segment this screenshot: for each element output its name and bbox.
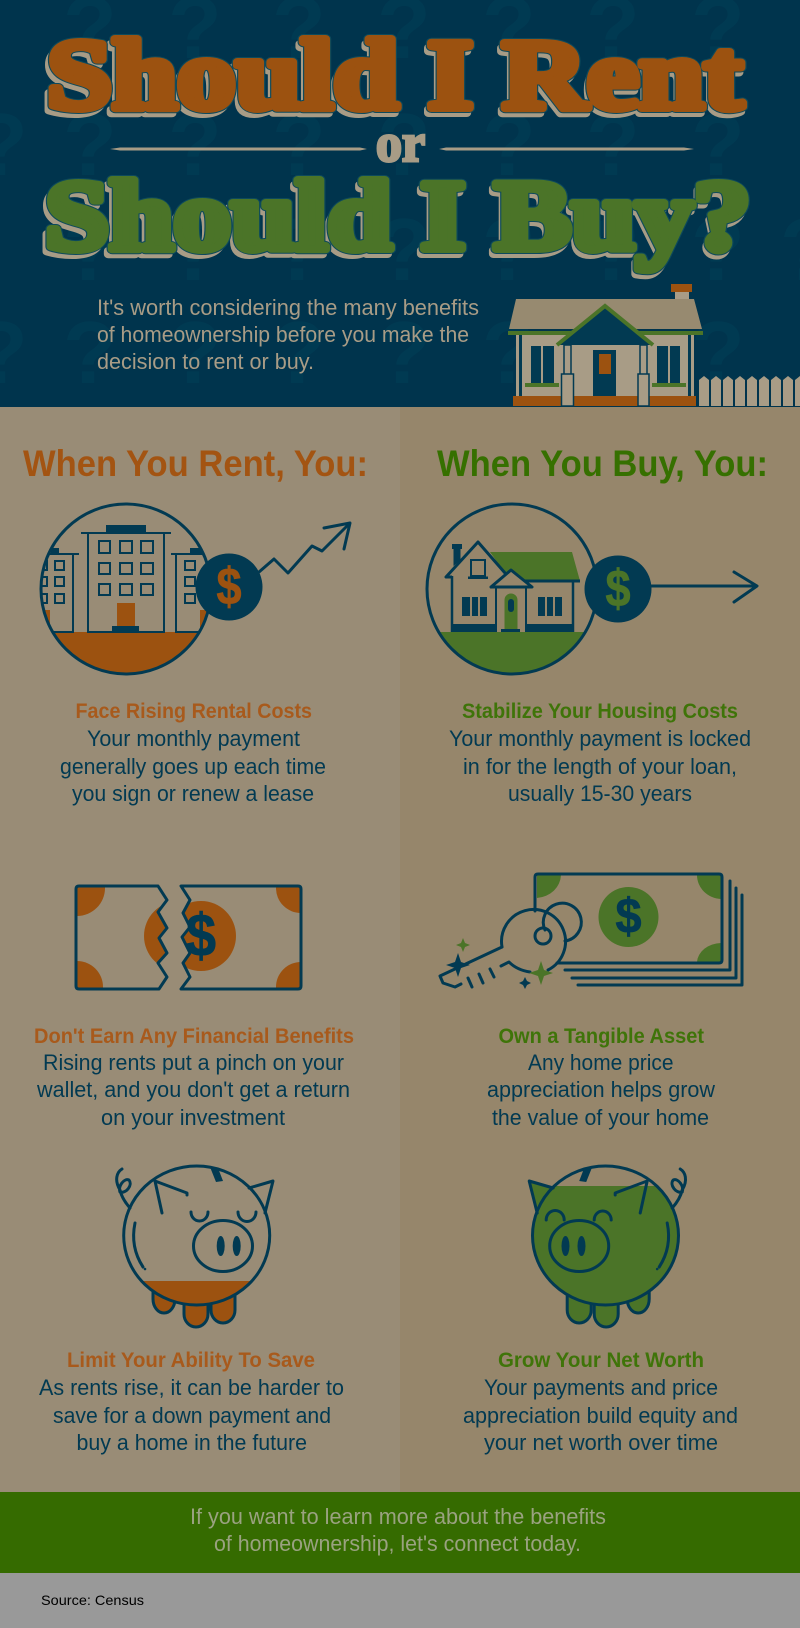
panel: source footer xyxy=(0,1573,800,1628)
text: stabilize your housing costs: in for the length of your loan, xyxy=(463,754,737,779)
text: own a tangible asset xyxy=(487,1025,715,1130)
panel: call to action banner: of homeownership, let's connect today. xyxy=(214,1531,581,1556)
text: don't earn any financial benefits: Don't Earn Any Financial Benefits xyxy=(34,1025,354,1048)
question mark pattern: ? xyxy=(586,95,640,194)
intro text: decision to rent or buy. xyxy=(97,349,314,374)
icon: torn dollar bill xyxy=(74,884,302,990)
text: grow your net worth: appreciation build equity and xyxy=(463,1403,738,1428)
title: or with rules: or xyxy=(376,113,425,173)
title: Should I Rent: Should I Rent xyxy=(43,24,741,135)
intro text: It's worth considering the many benefits xyxy=(97,295,479,320)
heading: when you buy: When You Buy, You: xyxy=(437,443,768,484)
question mark pattern: ? xyxy=(377,303,431,402)
question mark pattern: ? xyxy=(482,95,536,194)
text: face rising rental costs: generally goes up each time xyxy=(60,754,326,779)
text: own a tangible asset: appreciation helps grow xyxy=(487,1077,715,1102)
title: Should I Rent: Should I Rent xyxy=(47,19,743,130)
icon: piggy bank nearly empty xyxy=(117,1166,275,1327)
question mark pattern: ? xyxy=(63,303,117,402)
icon: picket fence xyxy=(699,376,800,406)
intro text: of homeownership before you make the xyxy=(97,322,469,347)
icon: house in circle with flat arrow: $ xyxy=(606,560,631,618)
question mark pattern: ? xyxy=(63,95,117,194)
text: limit your ability to save: save for a down payment and xyxy=(53,1403,331,1428)
title: Should I Buy?: Should I Buy? xyxy=(41,165,749,276)
text: don't earn any financial benefits: on your investment xyxy=(101,1105,285,1130)
text: own a tangible asset: Any home price xyxy=(528,1050,674,1075)
question mark pattern: ? xyxy=(586,200,640,299)
question mark pattern: ? xyxy=(482,303,536,402)
title: or with rules xyxy=(110,113,694,173)
icon: torn dollar bill: $ xyxy=(186,902,216,969)
text: don't earn any financial benefits xyxy=(34,1025,354,1130)
question mark pattern: ? xyxy=(168,303,222,402)
text: stabilize your housing costs: usually 15-30 years xyxy=(508,781,692,806)
question mark pattern: ? xyxy=(168,95,222,194)
text: stabilize your housing costs: Stabilize Your Housing Costs xyxy=(462,700,738,723)
question mark pattern: ? xyxy=(272,95,326,194)
panel: header background xyxy=(0,0,800,407)
text: grow your net worth: your net worth over time xyxy=(484,1430,718,1455)
icon: key and cash stack: $ xyxy=(616,890,642,944)
question mark pattern: ? xyxy=(272,200,326,299)
icon: apartment buildings in circle: $ xyxy=(216,558,242,616)
text: don't earn any financial benefits: Rising rents put a pinch on your xyxy=(43,1050,344,1075)
title: Should I Buy?: Should I Buy? xyxy=(45,160,751,271)
question mark pattern: ? xyxy=(377,95,431,194)
panel: source footer: Source: Census xyxy=(41,1592,144,1608)
icon: house illustration xyxy=(508,284,703,406)
question mark pattern: ? xyxy=(691,95,745,194)
text: limit your ability to save: As rents rise, it can be harder to xyxy=(39,1375,344,1400)
panel: call to action banner xyxy=(0,1492,800,1573)
question mark pattern: ? xyxy=(691,303,745,402)
text: stabilize your housing costs xyxy=(449,700,751,806)
question mark pattern: ? xyxy=(272,303,326,402)
icon: house in circle with flat arrow xyxy=(427,504,757,692)
icon: piggy bank nearly full xyxy=(527,1166,686,1327)
text: limit your ability to save: buy a home in the future xyxy=(76,1430,307,1455)
text: own a tangible asset: Own a Tangible Asset xyxy=(498,1025,704,1048)
text: face rising rental costs xyxy=(60,700,326,806)
question mark pattern: ? xyxy=(691,200,745,299)
heading: when you rent: When You Rent, You: xyxy=(23,443,368,484)
question mark pattern xyxy=(0,0,800,402)
text: face rising rental costs: you sign or renew a lease xyxy=(72,781,314,806)
question mark pattern: ? xyxy=(168,200,222,299)
title: Should I Rent: Should I Rent xyxy=(47,19,743,130)
text: grow your net worth: Your payments and price xyxy=(484,1375,718,1400)
text: limit your ability to save xyxy=(39,1349,344,1455)
text: face rising rental costs: Your monthly payment xyxy=(87,726,300,751)
panel: buy column xyxy=(400,407,800,1492)
intro text xyxy=(97,295,479,374)
text: limit your ability to save: Limit Your Ability To Save xyxy=(67,1349,315,1372)
text: stabilize your housing costs: Your monthly payment is locked xyxy=(449,726,751,751)
question mark pattern: ? xyxy=(63,200,117,299)
icon: apartment buildings in circle xyxy=(40,502,352,676)
text: don't earn any financial benefits: wallet, and you don't get a return xyxy=(36,1077,350,1102)
question mark pattern: ? xyxy=(377,200,431,299)
panel: call to action banner: If you want to learn more about the benefits xyxy=(190,1504,606,1529)
panel: rent column xyxy=(0,407,400,1492)
text: grow your net worth xyxy=(463,1349,738,1455)
title: Should I Buy?: Should I Buy? xyxy=(45,160,751,271)
text: face rising rental costs: Face Rising Rental Costs xyxy=(76,700,312,723)
text: grow your net worth: Grow Your Net Worth xyxy=(498,1349,704,1372)
question mark pattern: ? xyxy=(482,200,536,299)
icon: key and cash stack xyxy=(440,874,742,989)
text: own a tangible asset: the value of your home xyxy=(492,1105,709,1130)
